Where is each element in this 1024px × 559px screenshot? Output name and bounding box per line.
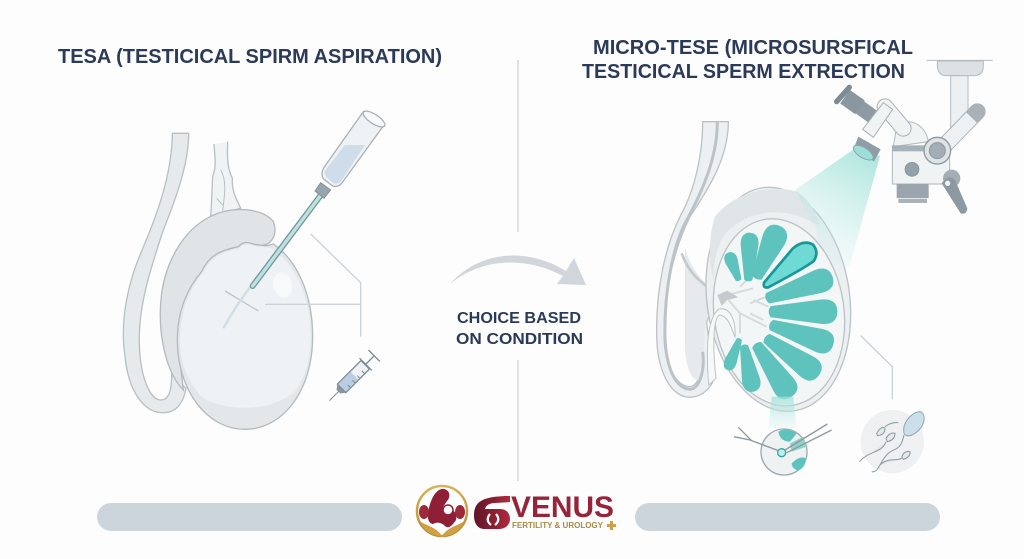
eyepiece tube bbox=[857, 105, 875, 118]
eyepiece barrel bbox=[845, 97, 860, 107]
angled block elbow fill bbox=[885, 107, 903, 128]
logo: tagline: FERTILITY & UROLOGY bbox=[512, 521, 604, 530]
logo: 6 symbol bbox=[474, 496, 510, 529]
forceps right bbox=[785, 424, 832, 453]
center divider lower bbox=[517, 360, 519, 481]
callout line bbox=[861, 336, 892, 399]
eyepiece ring bbox=[837, 87, 849, 102]
rete node bbox=[717, 291, 738, 306]
tissue teal 1 bbox=[778, 430, 797, 442]
vessel inner lines bbox=[217, 170, 225, 211]
angled block elbow bbox=[885, 107, 903, 128]
mount cup bbox=[937, 61, 983, 76]
title: Micro-TESE: TESTICICAL SPERM EXTRECTION bbox=[582, 61, 905, 83]
right kidney bbox=[455, 505, 465, 519]
right arm fill bbox=[945, 118, 972, 145]
column bbox=[951, 76, 968, 127]
lobules bbox=[722, 221, 837, 403]
handle hole bbox=[945, 181, 950, 186]
body shadow band bbox=[892, 145, 929, 151]
epididymis body bbox=[160, 210, 275, 390]
vial rim bbox=[361, 108, 387, 130]
cord duct branch bbox=[682, 253, 720, 297]
label: choice based on condition: CHOICE BASED bbox=[457, 310, 581, 327]
teal beam from microscope bbox=[795, 148, 880, 267]
vial bbox=[322, 112, 384, 186]
lower teal beam bbox=[768, 397, 797, 428]
objective lens housing bbox=[853, 137, 881, 161]
mother figure bbox=[428, 489, 456, 527]
specular spot bbox=[270, 270, 295, 300]
vial liquid bbox=[325, 145, 365, 184]
small sperm 1 bbox=[877, 422, 898, 436]
needle hub bbox=[315, 183, 331, 198]
label: choice based on condition bbox=[456, 310, 583, 348]
illustration: TESA testis with needle bbox=[123, 108, 387, 429]
body dot bbox=[905, 162, 919, 176]
logo: gold plus bbox=[607, 521, 616, 530]
label: choice based on condition: ON CONDITION bbox=[456, 331, 583, 348]
angled block front bbox=[863, 103, 893, 137]
joint center bbox=[929, 143, 945, 159]
handle bbox=[942, 177, 967, 214]
logo: emblem bbox=[417, 486, 467, 537]
vessels bbox=[211, 142, 241, 216]
lower barrel base bbox=[898, 199, 927, 203]
testis outer bbox=[692, 178, 865, 421]
child bbox=[443, 505, 453, 515]
knob backing bbox=[943, 170, 960, 187]
small sperm 2 bbox=[859, 433, 895, 462]
testis body bbox=[177, 242, 313, 429]
tissue teal 3 bbox=[790, 437, 807, 452]
tissue teal 2 bbox=[792, 457, 806, 471]
small syringe icon bbox=[323, 350, 380, 407]
callout lines bbox=[265, 234, 361, 337]
gold hands bbox=[421, 522, 463, 537]
needle inner bbox=[253, 194, 322, 286]
lower barrel bbox=[897, 184, 929, 198]
large sperm tail bbox=[872, 435, 904, 472]
kidney in symbol bbox=[488, 514, 498, 525]
testis highlight bbox=[180, 244, 311, 408]
joint bbox=[924, 137, 951, 164]
needle tip in tissue bbox=[223, 287, 251, 328]
center divider upper bbox=[517, 60, 519, 232]
microscope bbox=[837, 60, 993, 214]
left kidney bbox=[419, 505, 429, 519]
incision mark bbox=[225, 291, 258, 311]
spermatic cord tube bbox=[123, 133, 189, 413]
forceps left bbox=[734, 427, 778, 451]
objective lens glass bbox=[851, 142, 876, 163]
vas deferens inner bbox=[665, 122, 717, 389]
illustration: Micro-TESE testis with microscope bbox=[657, 60, 993, 475]
arrow: curved choice arrow bbox=[450, 256, 586, 285]
inset: sperm bbox=[859, 410, 924, 473]
head curve bbox=[893, 122, 928, 147]
logo panel backing bbox=[402, 482, 635, 548]
right arm outline bbox=[945, 112, 977, 145]
spermatic cord bbox=[657, 122, 728, 397]
right caption bar bbox=[635, 503, 940, 531]
left caption bar bbox=[97, 503, 402, 531]
highlighted lobule bbox=[764, 243, 816, 288]
testis inner lumen bbox=[702, 210, 856, 414]
cord side panel bbox=[685, 247, 718, 380]
title: Micro-TESE bbox=[582, 37, 913, 83]
inset: surgical tweezers bbox=[734, 424, 832, 475]
epididymis cap bbox=[710, 189, 820, 280]
title: TESA: TESA (TESTICICAL SPIRM ASPIRATION) bbox=[58, 46, 442, 68]
logo: VENUS wordmark: VENUS bbox=[511, 491, 614, 524]
large sperm bbox=[904, 412, 924, 436]
title: Micro-TESE: MICRO-TESE (MICROSURSFICAL bbox=[593, 37, 913, 59]
rete center fibres bbox=[727, 280, 768, 333]
ceiling mount bbox=[927, 59, 993, 62]
body box bbox=[892, 146, 950, 184]
white hook loop bbox=[707, 309, 735, 385]
small sperm 3 bbox=[880, 451, 910, 465]
needle shaft bbox=[253, 194, 322, 286]
target ring bbox=[778, 449, 786, 457]
